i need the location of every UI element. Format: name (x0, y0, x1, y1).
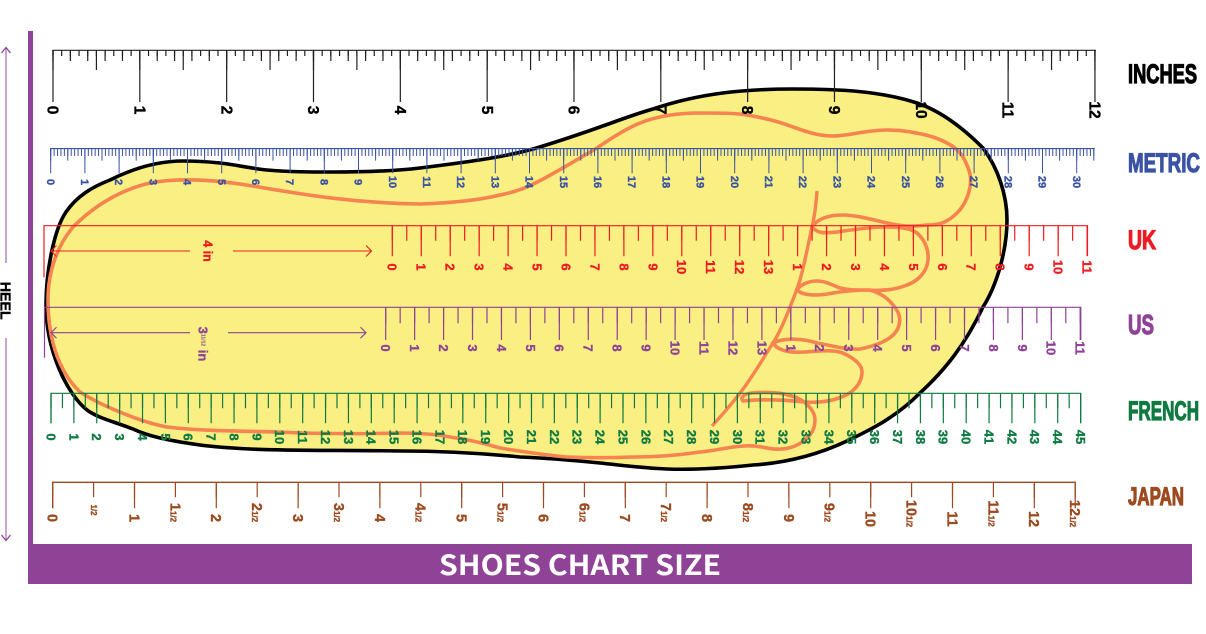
ruler: Japan: 1 1/2 (166, 503, 182, 523)
ruler: UK: 10 (1051, 260, 1066, 274)
ruler: Japan: 5 1/2 (494, 503, 510, 523)
ruler: inches: 0 (44, 106, 61, 114)
ruler: metric: 9 (352, 179, 364, 185)
ruler: French: 6 (181, 433, 196, 441)
ruler: inches (44, 50, 1103, 119)
ruler: metric: 28 (1001, 176, 1013, 188)
ruler: metric: 11 (420, 176, 432, 188)
ruler: Japan: 4 (371, 514, 387, 522)
ruler: Japan: 10 (862, 511, 878, 527)
ruler: UK: 10 (674, 260, 689, 274)
ruler: UK: 4 (501, 263, 516, 271)
ruler: metric: 30 (1070, 176, 1082, 188)
ruler: French: 33 (798, 430, 813, 444)
ruler: metric: 17 (625, 176, 637, 188)
measure arrow: 3 11/12 in: 3 (195, 327, 210, 334)
ruler: inches: 2 (217, 106, 234, 114)
ruler: French: 12 (318, 430, 333, 444)
ruler: inches: 6 (565, 106, 582, 115)
ruler: Japan: 6 (534, 514, 550, 522)
ruler: US: 9 (639, 344, 654, 352)
ruler: French: 0 (43, 433, 58, 441)
measure arrow: 3 11/12 in: 11/12 (199, 334, 205, 346)
ruler: metric: 26 (933, 176, 945, 188)
ruler: US: 11 (696, 341, 711, 355)
ruler: UK: 12 (732, 260, 747, 274)
ruler: UK: 6 (558, 263, 573, 271)
ruler: French: 8 (226, 433, 241, 441)
ruler: metric: 5 (215, 179, 227, 185)
ruler: inches: 7 (651, 106, 668, 114)
ruler: metric: 22 (796, 176, 808, 188)
ruler: US: 3 (841, 344, 856, 352)
ruler: US: 4 (870, 344, 885, 352)
ruler: French: 34 (821, 430, 836, 445)
ruler: UK: 5 (906, 263, 921, 271)
ruler: US: 7 (957, 344, 972, 352)
ruler: US: 1 (407, 344, 422, 352)
ruler: metric: 0 (44, 179, 56, 185)
ruler: French: 3 (112, 433, 127, 441)
ruler: French: 29 (707, 430, 722, 444)
ruler: inches: 10 (912, 101, 929, 119)
ruler: Japan: 8 1/2 (739, 503, 755, 523)
ruler: French: 30 (730, 430, 745, 444)
ruler: Japan: 9 1/2 (821, 503, 837, 523)
ruler: metric: 2 (112, 179, 124, 185)
ruler: inches: 9 (825, 106, 842, 115)
ruler: French: 15 (387, 430, 402, 444)
ruler: metric: 10 (386, 176, 398, 188)
ruler: Japan: 7 (616, 514, 632, 522)
ruler: US: 6 (552, 344, 567, 352)
ruler: metric: 6 (249, 179, 261, 185)
ruler: UK: 3 (472, 263, 487, 271)
ruler: UK: 8 (993, 263, 1008, 271)
ruler: French: 2 (89, 433, 104, 441)
foot inner contour with toes (48, 113, 971, 458)
ruler: US: 7 (581, 344, 596, 352)
ruler: inches: 4 (391, 106, 408, 115)
ruler: UK: 11 (1080, 260, 1095, 274)
title: SHOES CHART SIZE (439, 544, 721, 584)
ruler: metric: 12 (454, 176, 466, 188)
foot outline (46, 89, 1007, 469)
ruler: Japan: 1/2 (89, 504, 98, 516)
ruler: Japan: 2 1/2 (248, 503, 264, 523)
ruler: US: 9 (1015, 344, 1030, 352)
ruler: Japan: 4 1/2 (412, 503, 428, 523)
heel arrow (2, 48, 10, 540)
ruler: US (44, 307, 1088, 361)
ruler: US: 8 (610, 344, 625, 352)
ruler: French: 43 (1027, 430, 1042, 444)
ruler: metric: 18 (659, 176, 671, 188)
ruler: metric: 25 (899, 176, 911, 188)
ruler: Japan: 7 1/2 (657, 503, 673, 523)
ruler: UK: 7 (964, 263, 979, 271)
ruler: US: 3 (465, 344, 480, 352)
ruler: French: 25 (615, 430, 630, 444)
ruler: French: 27 (661, 430, 676, 444)
ruler: French: 23 (570, 430, 585, 444)
ruler: inches: 8 (738, 106, 755, 115)
measure arrow: 4 in: 4 in (201, 240, 215, 262)
ruler: UK: 9 (645, 263, 660, 271)
ruler: Japan: 12 1/2 (1066, 500, 1082, 528)
ruler: French: 5 (158, 433, 173, 441)
ruler: French: 31 (753, 430, 768, 444)
ruler: French: 44 (1050, 430, 1065, 445)
ruler: metric: 15 (557, 176, 569, 188)
ruler: French: 45 (1073, 430, 1088, 444)
ruler: UK: 2 (443, 263, 458, 271)
ruler: French: 16 (410, 430, 425, 444)
ruler: US: 8 (986, 344, 1001, 352)
arch line (712, 191, 817, 426)
ruler: US: 5 (523, 344, 538, 352)
ruler: metric: 19 (694, 176, 706, 188)
ruler: French: 19 (478, 430, 493, 444)
ruler: French: 41 (982, 430, 997, 444)
measure arrow: 3 11/12 in: in (195, 346, 210, 361)
ruler: UK: 5 (530, 263, 545, 271)
ruler: French: 10 (272, 430, 287, 444)
ruler: US: 11 (1073, 341, 1088, 355)
ruler: UK: 11 (703, 260, 718, 274)
ruler: metric: 13 (488, 176, 500, 188)
ruler: Japan: 8 (698, 514, 714, 522)
ruler: French: 14 (364, 430, 379, 445)
ruler: Japan: 2 (207, 514, 223, 522)
ruler: Japan: 9 (780, 514, 796, 522)
ruler: UK: 7 (587, 263, 602, 271)
ruler: Japan: 3 1/2 (330, 503, 346, 523)
ruler: US: 4 (494, 344, 509, 352)
ruler: metric: 14 (523, 176, 535, 189)
label: US: US (1128, 309, 1154, 340)
ruler: French: 22 (547, 430, 562, 444)
ruler: inches: 1 (130, 106, 147, 115)
ruler: inches: 5 (478, 106, 495, 115)
ruler: French: 11 (295, 430, 310, 444)
ruler: UK (44, 226, 1095, 277)
ruler: US: 13 (754, 341, 769, 355)
measure arrow: 3 11/12 in (51, 327, 366, 361)
ruler: UK: 0 (385, 263, 400, 271)
ruler: metric: 1 (78, 179, 90, 185)
ruler: French: 1 (66, 433, 81, 441)
ruler: French: 32 (776, 430, 791, 444)
ruler: French: 24 (593, 430, 608, 445)
ruler: Japan (44, 482, 1082, 528)
ruler: French: 21 (524, 430, 539, 444)
ruler: inches: 3 (304, 106, 321, 115)
ruler: UK: 6 (935, 263, 950, 271)
ruler: metric (44, 149, 1095, 189)
ruler: US: 10 (1044, 341, 1059, 355)
ruler: inches: 12 (1086, 101, 1103, 119)
ruler: metric: 20 (728, 176, 740, 188)
ruler: French: 20 (501, 430, 516, 444)
ruler: metric: 16 (591, 176, 603, 188)
ruler: French: 37 (890, 430, 905, 444)
ruler: US: 6 (928, 344, 943, 352)
ruler: UK: 13 (761, 260, 776, 274)
ruler: Japan: 3 (289, 514, 305, 522)
ruler: French: 42 (1004, 430, 1019, 444)
ruler: UK: 9 (1022, 263, 1037, 271)
ruler: Japan: 1 (125, 514, 141, 522)
ruler: UK: 8 (616, 263, 631, 271)
ruler: Japan: 6 1/2 (575, 503, 591, 523)
ruler: UK: 2 (819, 263, 834, 271)
ruler: metric: 24 (865, 176, 877, 189)
ruler: Japan: 11 (943, 511, 959, 527)
ruler: metric: 7 (283, 179, 295, 185)
ruler: French: 28 (684, 430, 699, 444)
ruler: US: 1 (783, 344, 798, 352)
ruler: French: 9 (249, 433, 264, 441)
ruler: metric: 21 (762, 176, 774, 188)
ruler: French: 35 (844, 430, 859, 444)
ruler: French: 13 (341, 430, 356, 444)
ruler: French: 36 (867, 430, 882, 444)
left purple bar (28, 31, 33, 545)
ruler: French: 17 (432, 430, 447, 444)
ruler: metric: 23 (830, 176, 842, 188)
ruler: French: 39 (936, 430, 951, 444)
ruler: Japan: 0 (44, 514, 60, 522)
ruler: UK: 4 (877, 263, 892, 271)
ruler: US: 12 (725, 341, 740, 355)
ruler: Japan: 10 1/2 (903, 500, 919, 528)
ruler: UK: 3 (848, 263, 863, 271)
ruler: metric: 29 (1036, 176, 1048, 188)
ruler: inches: 11 (999, 102, 1016, 119)
ruler: US: 0 (378, 344, 393, 352)
ruler: metric: 4 (181, 179, 193, 186)
ruler: French: 38 (913, 430, 928, 444)
ruler: metric: 27 (967, 176, 979, 188)
ruler: French (43, 393, 1088, 445)
ruler: US: 2 (812, 344, 827, 352)
ruler: French: 40 (959, 430, 974, 444)
ruler: UK: 1 (414, 263, 429, 271)
ruler: Japan: 11 1/2 (984, 500, 1000, 527)
ruler: Japan: 12 (1025, 511, 1041, 527)
ruler: UK: 1 (790, 263, 805, 271)
ruler: US: 5 (899, 344, 914, 352)
ruler: metric: 3 (146, 179, 158, 185)
ruler: US: 2 (436, 344, 451, 352)
ruler: French: 7 (204, 433, 219, 441)
ruler: French: 4 (135, 433, 150, 441)
ruler: metric: 8 (317, 179, 329, 185)
ruler: French: 26 (638, 430, 653, 444)
ruler: French: 18 (455, 430, 470, 444)
label: UK: UK (1128, 225, 1156, 255)
measure arrow: 4 in (51, 240, 372, 262)
title banner (28, 544, 1192, 584)
ruler: US: 10 (668, 341, 683, 355)
ruler: Japan: 5 (453, 514, 469, 522)
